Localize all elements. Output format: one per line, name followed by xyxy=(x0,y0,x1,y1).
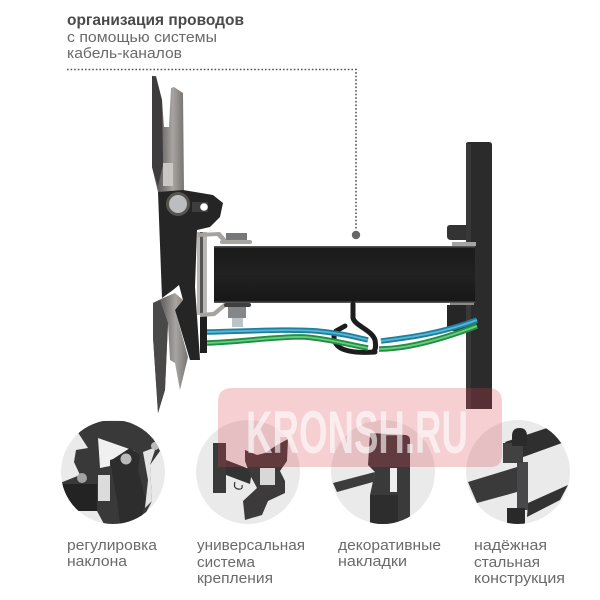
lower bolt xyxy=(200,303,228,317)
heading: cable management xyxy=(67,12,244,62)
adjustment bolt xyxy=(166,192,190,216)
label: steel construction: надёжная xyxy=(474,538,547,554)
silver upright xyxy=(197,232,207,315)
label: universal mount xyxy=(197,538,305,587)
wall plate post xyxy=(447,142,492,409)
detail circle: steel construction xyxy=(466,420,570,524)
label: decorative caps xyxy=(338,538,441,570)
heading: cable management: с помощью системы xyxy=(67,29,217,46)
heading: cable management: кабель-каналов xyxy=(67,45,182,62)
detail circle: tilt adjustment xyxy=(60,420,165,524)
label: universal mount: универсальная xyxy=(197,538,305,554)
label: tilt adjustment xyxy=(67,538,158,570)
tilt bracket xyxy=(152,76,252,413)
label: universal mount: крепления xyxy=(197,571,273,587)
cable hook: front part xyxy=(353,304,376,352)
label: tilt adjustment: регулировка xyxy=(67,538,158,554)
heading: cable management: организация проводов xyxy=(67,12,244,29)
label: universal mount: система xyxy=(197,555,256,571)
bottom VESA plate xyxy=(153,293,188,413)
label: steel construction: стальная xyxy=(474,555,540,571)
label: decorative caps: декоративные xyxy=(338,538,441,554)
detail circle: universal mount xyxy=(196,420,300,524)
cable hook: back part xyxy=(334,326,375,352)
cable: blue and green wires xyxy=(207,320,477,349)
horizontal swivel arm xyxy=(214,246,475,303)
top VESA plate xyxy=(152,76,184,192)
detail circle: decorative caps xyxy=(331,420,435,524)
label: tilt adjustment: наклона xyxy=(67,554,128,570)
tilt body xyxy=(158,190,223,360)
label: steel construction: конструкция xyxy=(474,571,565,587)
label: decorative caps: накладки xyxy=(338,554,407,570)
dotted leader line xyxy=(67,70,360,239)
upper bolt xyxy=(198,232,228,243)
label: steel construction xyxy=(474,538,565,587)
side plate slot xyxy=(192,202,208,212)
watermark: KRONSH.RU: KRONSH.RU xyxy=(246,399,468,466)
watermark: KRONSH.RU xyxy=(218,388,502,467)
